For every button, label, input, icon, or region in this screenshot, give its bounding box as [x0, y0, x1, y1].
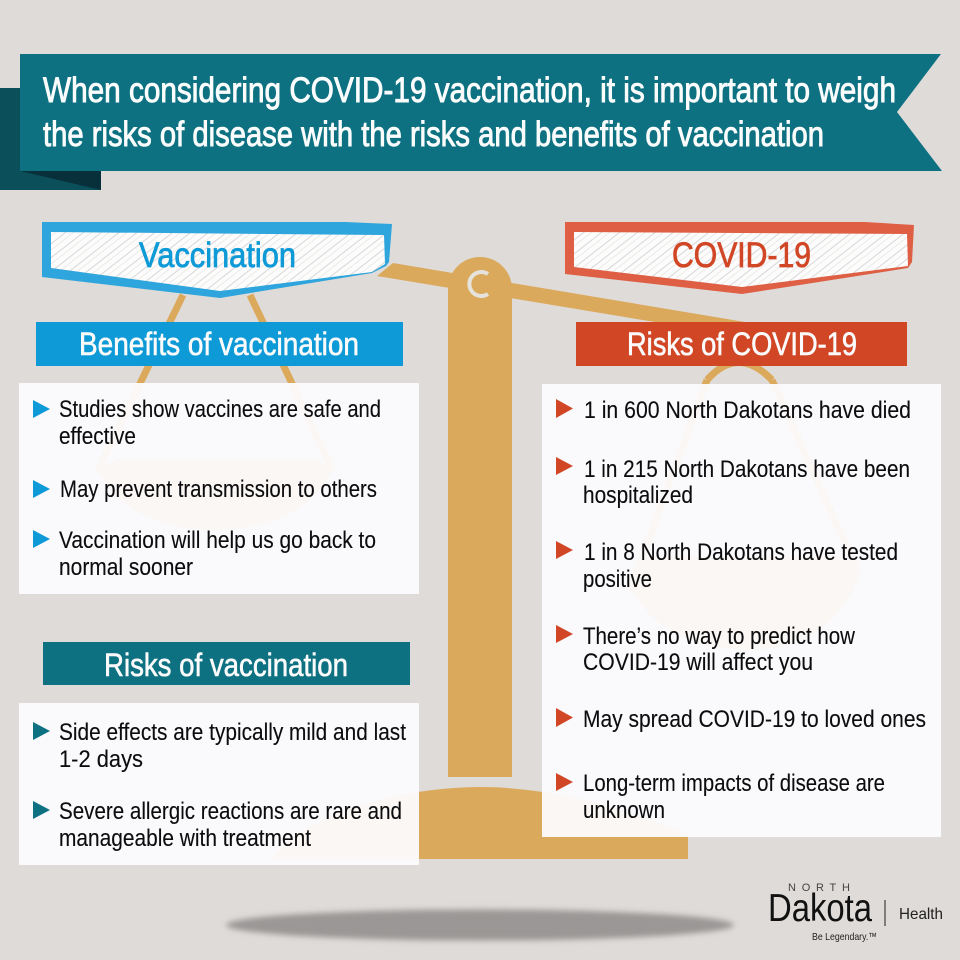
vaccination scale label: Vaccination: [139, 236, 296, 275]
risk: hospitalized: 1 in 215 North Dakotans have been: [584, 456, 910, 483]
title text: [43, 71, 896, 154]
panel: risks of vaccination: [19, 703, 419, 865]
risk: unpredictable: [556, 623, 855, 676]
heading: risks of vaccination: [43, 642, 410, 685]
logo: North Dakota Health: Dakota: [768, 887, 872, 930]
heading: risks of covid-19: Risks of COVID-19: [627, 326, 857, 362]
heading: risks of covid-19: [576, 322, 907, 366]
benefit: back to normal: [33, 527, 376, 581]
benefit: back to normal: normal sooner: [59, 554, 193, 581]
risk: tested positive: positive: [583, 566, 652, 593]
scale pivot ring: [469, 272, 488, 296]
benefit: safe and effective: [33, 396, 381, 450]
panel: benefits of vaccination: [19, 383, 419, 594]
scale base: [273, 787, 688, 859]
benefit: safe and effective: effective: [59, 423, 136, 450]
risk: unpredictable: COVID-19 will affect you: [583, 649, 813, 676]
right pan and strings: [630, 362, 860, 650]
risk: side effects: 1-2 days: [59, 746, 143, 773]
ground shadow: [226, 910, 734, 940]
risk: side effects: [33, 719, 406, 773]
risk: died: 1 in 600 North Dakotans have died: [584, 397, 911, 424]
title banner: [20, 54, 942, 171]
heading: risks of vaccination: Risks of vaccination: [104, 647, 348, 683]
benefit: safe and effective: Studies show vaccines are safe and: [59, 396, 381, 423]
logo: North Dakota Health: NORTH: [788, 882, 850, 894]
balance scale illustration: [98, 257, 860, 859]
scale post: [448, 257, 512, 777]
risk: unpredictable: There’s no way to predict how: [583, 623, 855, 650]
covid scale label: COVID-19: [672, 236, 811, 275]
title text: the risks of disease with the risks and benefits of vaccination: [43, 115, 824, 154]
risk: long-term impacts: Long-term impacts of disease are: [583, 770, 885, 797]
risk: side effects: Side effects are typically mild and last: [59, 719, 406, 746]
vaccination scale label: [42, 222, 392, 298]
left pan and strings: [98, 295, 333, 530]
logo: North Dakota Health: [768, 882, 943, 943]
banner ribbon tail: [0, 88, 101, 190]
risk: long-term impacts: unknown: [583, 797, 665, 824]
benefit: prevent transmission: May prevent transmission to others: [60, 476, 377, 503]
heading: benefits of vaccination: Benefits of vaccination: [79, 326, 359, 362]
risk: long-term impacts: [556, 770, 885, 824]
risk: allergic reactions: [33, 798, 402, 852]
risk: allergic reactions: manageable with treatment: [59, 825, 311, 852]
risk: hospitalized: hospitalized: [583, 482, 693, 509]
covid scale label: [565, 222, 914, 294]
risk: tested positive: [556, 539, 898, 593]
risk: hospitalized: [556, 456, 910, 509]
logo: North Dakota Health: Health: [899, 906, 943, 923]
benefit: back to normal: Vaccination will help us go back to: [59, 527, 376, 554]
risk: tested positive: 1 in 8 North Dakotans have tested: [584, 539, 898, 566]
logo: North Dakota Health: Be Legendary.™: [812, 931, 877, 943]
panel: risks of covid-19: [542, 384, 941, 837]
risk: allergic reactions: Severe allergic reactions are rare and: [59, 798, 402, 825]
scale beam: [377, 263, 745, 322]
